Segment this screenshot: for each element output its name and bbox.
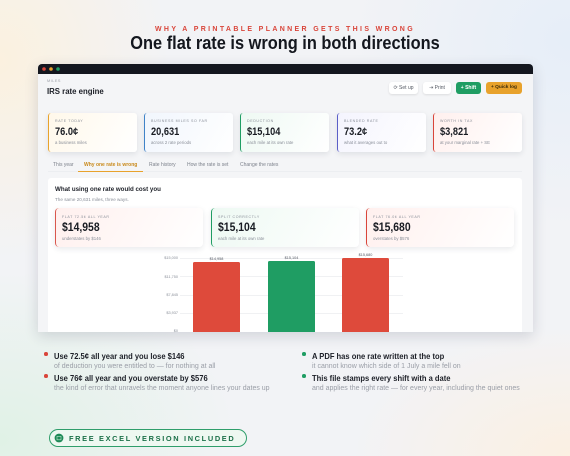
scenario: flat 72.5: understates by $146 bbox=[62, 236, 101, 241]
bar label: split correctly: $15,104 bbox=[285, 256, 298, 260]
bar chart: $3,937 bbox=[166, 311, 178, 315]
app section label: MILES bbox=[47, 79, 61, 83]
kpi: business miles: 20,631 bbox=[151, 126, 179, 138]
kpi: worth in tax: $3,821 bbox=[440, 126, 468, 138]
bar label: flat 76: $15,680 bbox=[359, 253, 372, 257]
bar chart: $7,845 bbox=[166, 293, 178, 297]
scenario: flat 76: $15,680 bbox=[373, 220, 411, 234]
panel heading: What using one rate would cost you bbox=[55, 186, 161, 192]
kpi: deduction: DEDUCTION bbox=[247, 119, 274, 123]
bullet: pdf one rate: A PDF has one rate written at the top bbox=[312, 352, 444, 360]
kpi: business miles: BUSINESS MILES SO FAR bbox=[151, 119, 208, 123]
bullet: overstate 576: Use 76¢ all year and you overstate by $576 bbox=[54, 374, 208, 382]
bar: split correctly bbox=[268, 261, 315, 332]
panel subheading: The same 20,631 miles, three ways. bbox=[55, 196, 129, 202]
scenario: split correctly: SPLIT CORRECTLY bbox=[218, 215, 260, 219]
scenario: split correctly: each mile at its own rate bbox=[218, 236, 264, 241]
bullet: stamps every shift: This file stamps every shift with a date bbox=[312, 374, 450, 382]
button: print: ⇥ Print bbox=[429, 85, 445, 91]
eyebrow heading: WHY A PRINTABLE PLANNER GETS THIS WRONG bbox=[155, 26, 415, 32]
tab: rate history: Rate history bbox=[149, 162, 176, 168]
kpi: business miles: across 2 rate periods bbox=[151, 140, 191, 145]
bar chart: $11,750 bbox=[165, 275, 178, 279]
title: One flat rate is wrong in both directions bbox=[130, 33, 440, 53]
bullet marker: pdf bbox=[302, 352, 306, 356]
bar: flat 72.5 bbox=[193, 262, 240, 332]
bullet marker: 76 bbox=[44, 374, 48, 378]
panel: app window bbox=[38, 64, 533, 332]
button: print bbox=[423, 82, 451, 94]
bullet detail: overstate 576: the kind of error that unravels the moment anyone lines your dates up bbox=[54, 384, 270, 392]
button: quick log bbox=[486, 82, 522, 94]
bar: flat 76 bbox=[342, 258, 389, 332]
tab: this year: This year bbox=[53, 162, 74, 168]
icon: excel badge bbox=[54, 434, 64, 442]
kpi: rate today bbox=[48, 113, 137, 152]
kpi: blended rate: BLENDED RATE bbox=[344, 119, 378, 123]
panel: comparison bbox=[48, 178, 522, 332]
tab: how the rate is set: How the rate is set bbox=[187, 162, 228, 168]
bar chart: $0 bbox=[174, 329, 178, 333]
kpi: rate today: 76.0¢ bbox=[55, 126, 78, 138]
scenario: flat 76 bbox=[366, 208, 514, 247]
bullet: lose 146: Use 72.5¢ all year and you lose $146 bbox=[54, 352, 185, 360]
scenario: flat 72.5: FLAT 72.5¢ ALL YEAR bbox=[62, 215, 110, 219]
kpi: rate today: a business miles bbox=[55, 140, 87, 145]
callout text: FREE EXCEL VERSION INCLUDED bbox=[69, 434, 235, 442]
kpi: worth in tax: WORTH IN TAX bbox=[440, 119, 473, 123]
button: set up: ⟳ Set up bbox=[393, 85, 414, 91]
kpi: rate today: RATE TODAY bbox=[55, 119, 83, 123]
button: shift: + Shift bbox=[461, 85, 476, 91]
tab: change the rates: Change the rates bbox=[240, 162, 278, 168]
tab underline bbox=[78, 171, 143, 172]
kpi: blended rate: 73.2¢ bbox=[344, 126, 367, 138]
scenario: split correctly: $15,104 bbox=[218, 220, 256, 234]
callout: free excel version bbox=[49, 429, 247, 447]
scenario: split correctly bbox=[211, 208, 359, 247]
kpi: worth in tax: at your marginal rate + SE bbox=[440, 140, 490, 145]
window title bar bbox=[38, 64, 533, 74]
bar chart: $15,000 bbox=[164, 256, 178, 260]
kpi: deduction: each mile at its own rate bbox=[247, 140, 293, 145]
button: quick log: + Quick log bbox=[491, 85, 517, 90]
bar label: flat 72.5: $14,958 bbox=[210, 257, 223, 261]
scenario: flat 72.5: $14,958 bbox=[62, 220, 100, 234]
scenario: flat 76: overstates by $576 bbox=[373, 236, 409, 241]
tab: why one rate is wrong: Why one rate is wrong bbox=[84, 162, 137, 168]
bullet marker: 72.5 bbox=[44, 352, 48, 356]
button: shift bbox=[456, 82, 481, 94]
kpi: blended rate bbox=[337, 113, 426, 152]
tabs bbox=[48, 160, 522, 172]
scenario: flat 76: FLAT 76.0¢ ALL YEAR bbox=[373, 215, 421, 219]
app heading: IRS rate engine bbox=[47, 87, 104, 96]
kpi: business miles bbox=[144, 113, 233, 152]
kpi: worth in tax bbox=[433, 113, 522, 152]
bar chart bbox=[164, 253, 403, 333]
kpi: deduction bbox=[240, 113, 329, 152]
bullet detail: lose 146: of deduction you were entitled to — for nothing at all bbox=[54, 362, 216, 370]
icon: window controls bbox=[42, 67, 60, 71]
bullet detail: pdf: it cannot know which side of 1 July a mile fell on bbox=[312, 362, 461, 370]
kpi: blended rate: what it averages out to bbox=[344, 140, 387, 145]
bullet marker: stamps bbox=[302, 374, 306, 378]
kpi: deduction: $15,104 bbox=[247, 126, 280, 138]
scenario: flat 72.5 bbox=[55, 208, 203, 247]
button: set up bbox=[389, 82, 418, 94]
bullet detail: stamps: and applies the right rate — for every year, including the quiet ones bbox=[312, 384, 520, 392]
